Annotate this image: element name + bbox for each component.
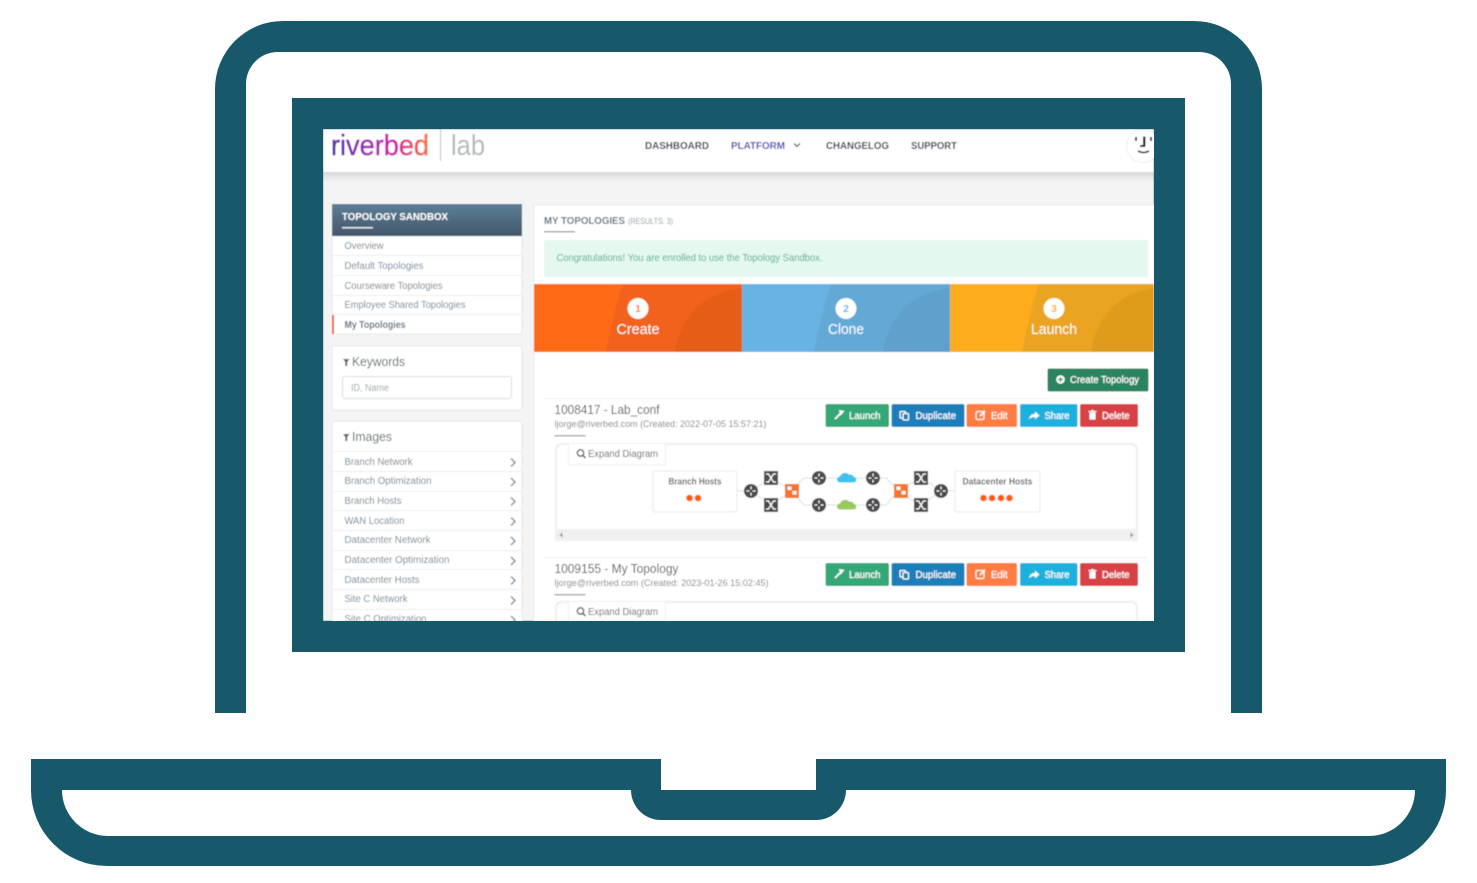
main heading: MY TOPOLOGIES: [544, 215, 625, 227]
action buttons row 2: Duplicate: [916, 570, 956, 581]
topology 1009155 heading: ljorge@riverbed.com (Created: 2023-01-26 15:02:45): [554, 578, 768, 589]
sidebar item: default topologies: Default Topologies: [344, 261, 424, 272]
sidebar item: courseware topologies: Courseware Topologies: [344, 281, 442, 292]
laptop lid frame: [215, 21, 1262, 713]
action buttons row 2: Share: [1044, 570, 1070, 581]
image list rows: Branch Hosts: [344, 496, 402, 507]
image list rows: Site C Optimization: [344, 614, 426, 625]
images heading: Images: [352, 430, 392, 444]
main heading: (RESULTS: 3): [628, 217, 673, 226]
screen bezel: [292, 98, 1185, 652]
main heading: [544, 215, 673, 232]
action buttons row 2: Delete: [1102, 570, 1130, 581]
topology 1009155 heading: [554, 562, 768, 596]
datacenter hosts box: [955, 471, 1040, 512]
banner step 1: create: Create: [616, 322, 660, 338]
action buttons row 1: Share: [1044, 411, 1070, 422]
action buttons row 1: [826, 404, 1138, 427]
filter panel: keywords: [332, 346, 522, 410]
cloud: blue: [837, 473, 856, 482]
screen: application screenshot: [323, 129, 1160, 640]
optimizers: [785, 484, 908, 498]
nav item: dashboard: DASHBOARD: [645, 140, 709, 152]
icon: funnel: [343, 359, 350, 366]
branch hosts box: [653, 471, 737, 512]
switches: [764, 471, 928, 512]
image list rows: Datacenter Network: [344, 535, 431, 546]
banner step 2: clone: Clone: [828, 322, 864, 338]
image list rows: Datacenter Hosts: [344, 575, 420, 586]
sidebar item: overview: Overview: [344, 241, 384, 252]
banner step 3: launch: Launch: [1031, 322, 1077, 338]
action buttons row 1: Delete: [1102, 411, 1130, 422]
topology 1008417 heading: [554, 403, 766, 436]
expand diagram tab: [568, 444, 666, 465]
banner step 2: clone: [742, 284, 950, 352]
nav item: changelog: CHANGELOG: [826, 140, 889, 152]
success alert: [544, 240, 1148, 277]
datacenter hosts box: Datacenter Hosts: [962, 476, 1032, 486]
success alert: Congratulations! You are enrolled to use the Topology Sandbox.: [556, 253, 822, 264]
sidebar header: TOPOLOGY SANDBOX: [342, 211, 448, 223]
riverbed logo: riverbed: [331, 130, 429, 162]
laptop base: [31, 759, 1446, 866]
search input: [342, 376, 512, 398]
nav item: support: SUPPORT: [911, 140, 958, 152]
action buttons row 2: Edit: [991, 570, 1008, 581]
main panel: my topologies: [534, 205, 1159, 640]
sidebar item: my topologies (active): [332, 315, 406, 334]
sidebar panel: topology sandbox: [332, 204, 522, 334]
sidebar header: [332, 204, 522, 236]
lab wordmark: lab: [451, 130, 485, 162]
expand diagram tab: Expand Diagram: [588, 607, 658, 618]
topology diagram 2: [555, 601, 1138, 640]
button: create topology: Create Topology: [1070, 375, 1139, 386]
image list rows: Site C Network: [344, 594, 408, 605]
icon: chevron: [794, 144, 800, 146]
expand diagram tab: Expand Diagram: [588, 449, 658, 460]
banner step 3: launch: 3: [1051, 304, 1057, 315]
image list rows: [344, 457, 515, 625]
banner step 1: create: [534, 284, 742, 352]
cloud: green: [837, 500, 856, 510]
icon: avatar face: [1126, 129, 1154, 163]
action buttons row 1: Edit: [991, 411, 1008, 422]
nav item: platform: PLATFORM: [731, 140, 785, 152]
action buttons row 2: Launch: [849, 570, 880, 581]
image list rows: WAN Location: [344, 516, 404, 527]
action buttons row 1: Duplicate: [916, 411, 956, 422]
scrollbar: [559, 532, 1134, 538]
keywords heading: Keywords: [352, 355, 405, 369]
image list rows: Branch Network: [344, 457, 413, 468]
banner step 3: launch: [950, 284, 1154, 352]
button: create topology: [1048, 368, 1148, 392]
action buttons row 2: [826, 563, 1138, 586]
topology 1009155 heading: 1009155 - My Topology: [554, 562, 679, 576]
banner step 2: clone: 2: [843, 304, 849, 315]
top navigation bar: [323, 129, 1160, 172]
branch hosts box: Branch Hosts: [668, 476, 722, 486]
topology 1008417 heading: ljorge@riverbed.com (Created: 2022-07-05 15:57:21): [554, 419, 766, 430]
filter panel: images: [332, 421, 522, 631]
connector lines: [737, 478, 955, 505]
sidebar item: employee shared topologies: Employee Shared Topologies: [344, 300, 466, 311]
sidebar item: my topologies (active): My Topologies: [344, 320, 406, 331]
image list rows: Datacenter Optimization: [344, 555, 450, 566]
expand diagram tab: [568, 602, 666, 632]
search input: ID, Name: [351, 383, 389, 394]
action buttons row 1: Launch: [849, 411, 880, 422]
routers: [744, 471, 948, 512]
topology diagram 1: [555, 443, 1138, 541]
image list rows: Branch Optimization: [344, 476, 432, 487]
topology 1008417 heading: 1008417 - Lab_conf: [554, 403, 660, 417]
banner step 1: create: 1: [635, 304, 641, 315]
icon: funnel: [343, 434, 350, 441]
